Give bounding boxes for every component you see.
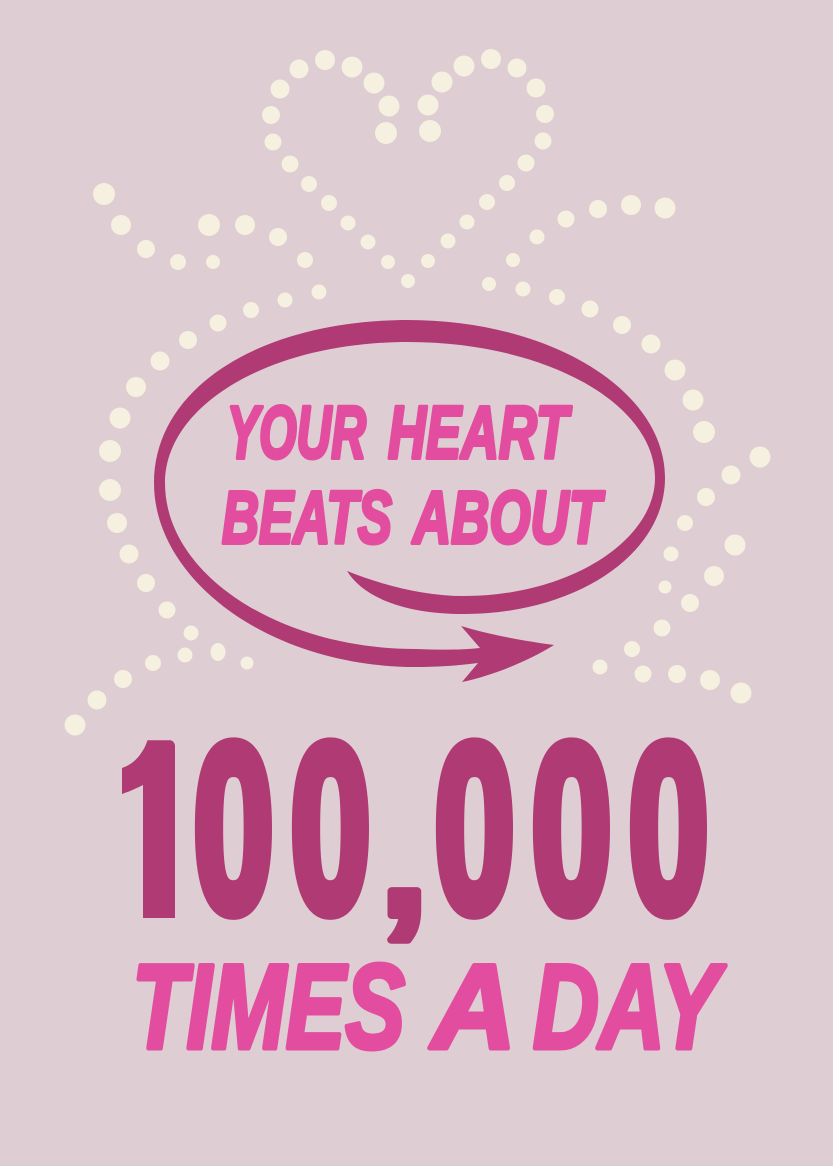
big number: 0 [628, 697, 709, 962]
big number: 1 [104, 697, 203, 962]
heading: times a day [132, 940, 727, 1074]
big number [122, 737, 707, 944]
big number: , [380, 770, 429, 949]
dotted ribbon: upper right [482, 195, 715, 443]
dotted heart [262, 49, 554, 288]
heading: times a day: TIMES [132, 940, 405, 1074]
heading: your heart beats about: HEART [388, 391, 572, 474]
big number: 0 [531, 697, 612, 962]
heading: your heart beats about: BEATS [222, 476, 392, 559]
heading: your heart beats about [222, 391, 605, 559]
big number: 0 [290, 697, 371, 962]
big number: 0 [434, 697, 515, 962]
big number: 0 [193, 697, 274, 962]
heading: times a day: A [429, 940, 516, 1074]
heading: your heart beats about: YOUR [227, 391, 366, 474]
infographic canvas [64, 49, 770, 1052]
dotted ribbon: upper left [64, 183, 326, 736]
oval arrow [154, 320, 665, 682]
heading: times a day: DAY [533, 940, 727, 1074]
heading: your heart beats about: ABOUT [412, 476, 605, 559]
dotted ribbon: lower right [592, 446, 770, 704]
